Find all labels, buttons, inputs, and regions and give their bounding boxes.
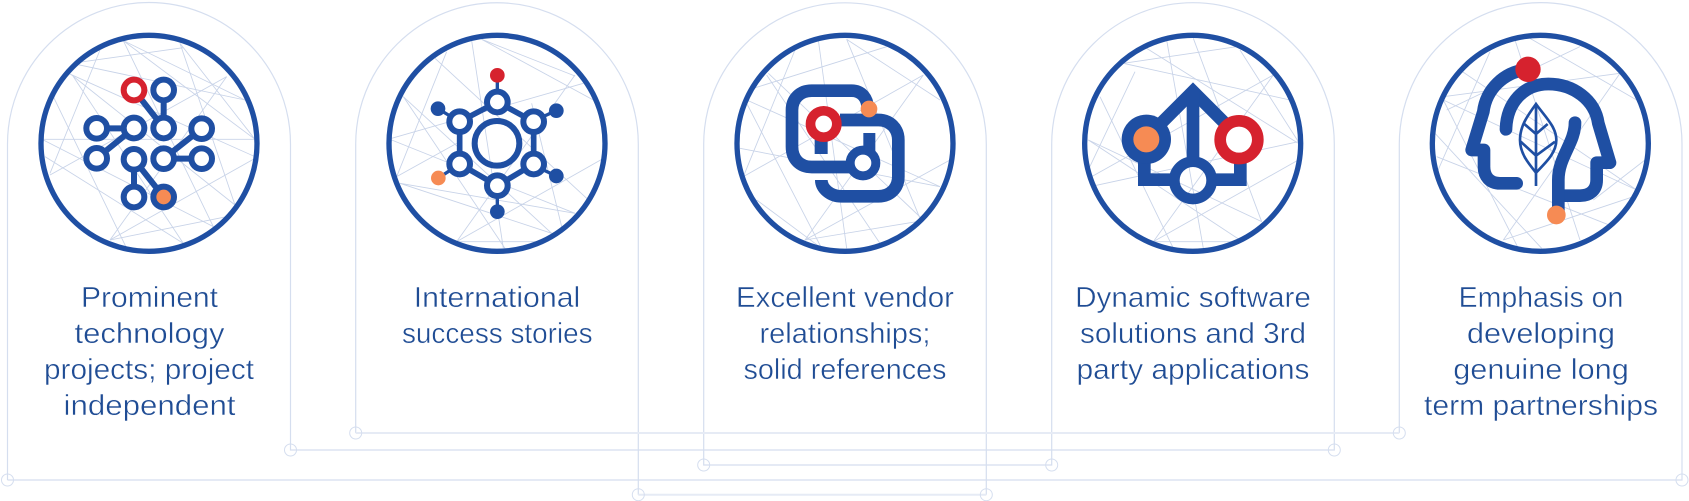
icon: interlinked rounded squares medallion xyxy=(737,35,953,251)
panel: international success stories xyxy=(389,35,605,350)
text: caption 1: projects; project xyxy=(44,354,254,386)
icon: branching arrow medallion xyxy=(1085,35,1301,251)
text: caption 5: term partnerships xyxy=(1424,390,1658,422)
text: caption 1: independent xyxy=(64,390,236,422)
text: caption 2 xyxy=(402,282,593,350)
panel: dynamic software solutions xyxy=(1075,35,1311,386)
text: caption 5: genuine long xyxy=(1453,354,1629,386)
text: caption 3: solid references xyxy=(744,354,946,386)
panel: emphasis on partnerships xyxy=(1424,35,1658,422)
text: caption 2: success stories xyxy=(402,318,593,350)
panel: prominent technology projects xyxy=(41,35,257,422)
icon: network nodes medallion xyxy=(41,35,257,251)
text: caption 4: party applications xyxy=(1076,354,1310,386)
icon: two heads with leaf medallion xyxy=(1432,35,1648,251)
text: caption 4: Dynamic software xyxy=(1075,282,1311,314)
text: caption 1 xyxy=(44,282,254,422)
text: caption 4: solutions and 3rd xyxy=(1080,318,1306,350)
text: caption 1: Prominent xyxy=(81,282,218,314)
text: caption 1: technology xyxy=(74,318,225,350)
panel: excellent vendor relationships xyxy=(736,35,955,386)
text: caption 3: relationships; xyxy=(760,318,930,350)
text: caption 2: International xyxy=(414,282,580,314)
text: caption 5 xyxy=(1424,282,1658,422)
text: caption 4 xyxy=(1075,282,1311,386)
text: caption 3: Excellent vendor xyxy=(736,282,955,314)
text: caption 5: developing xyxy=(1467,318,1615,350)
text: caption 3 xyxy=(736,282,955,386)
icon: hexagon molecule medallion xyxy=(389,35,605,251)
text: caption 5: Emphasis on xyxy=(1459,282,1623,314)
